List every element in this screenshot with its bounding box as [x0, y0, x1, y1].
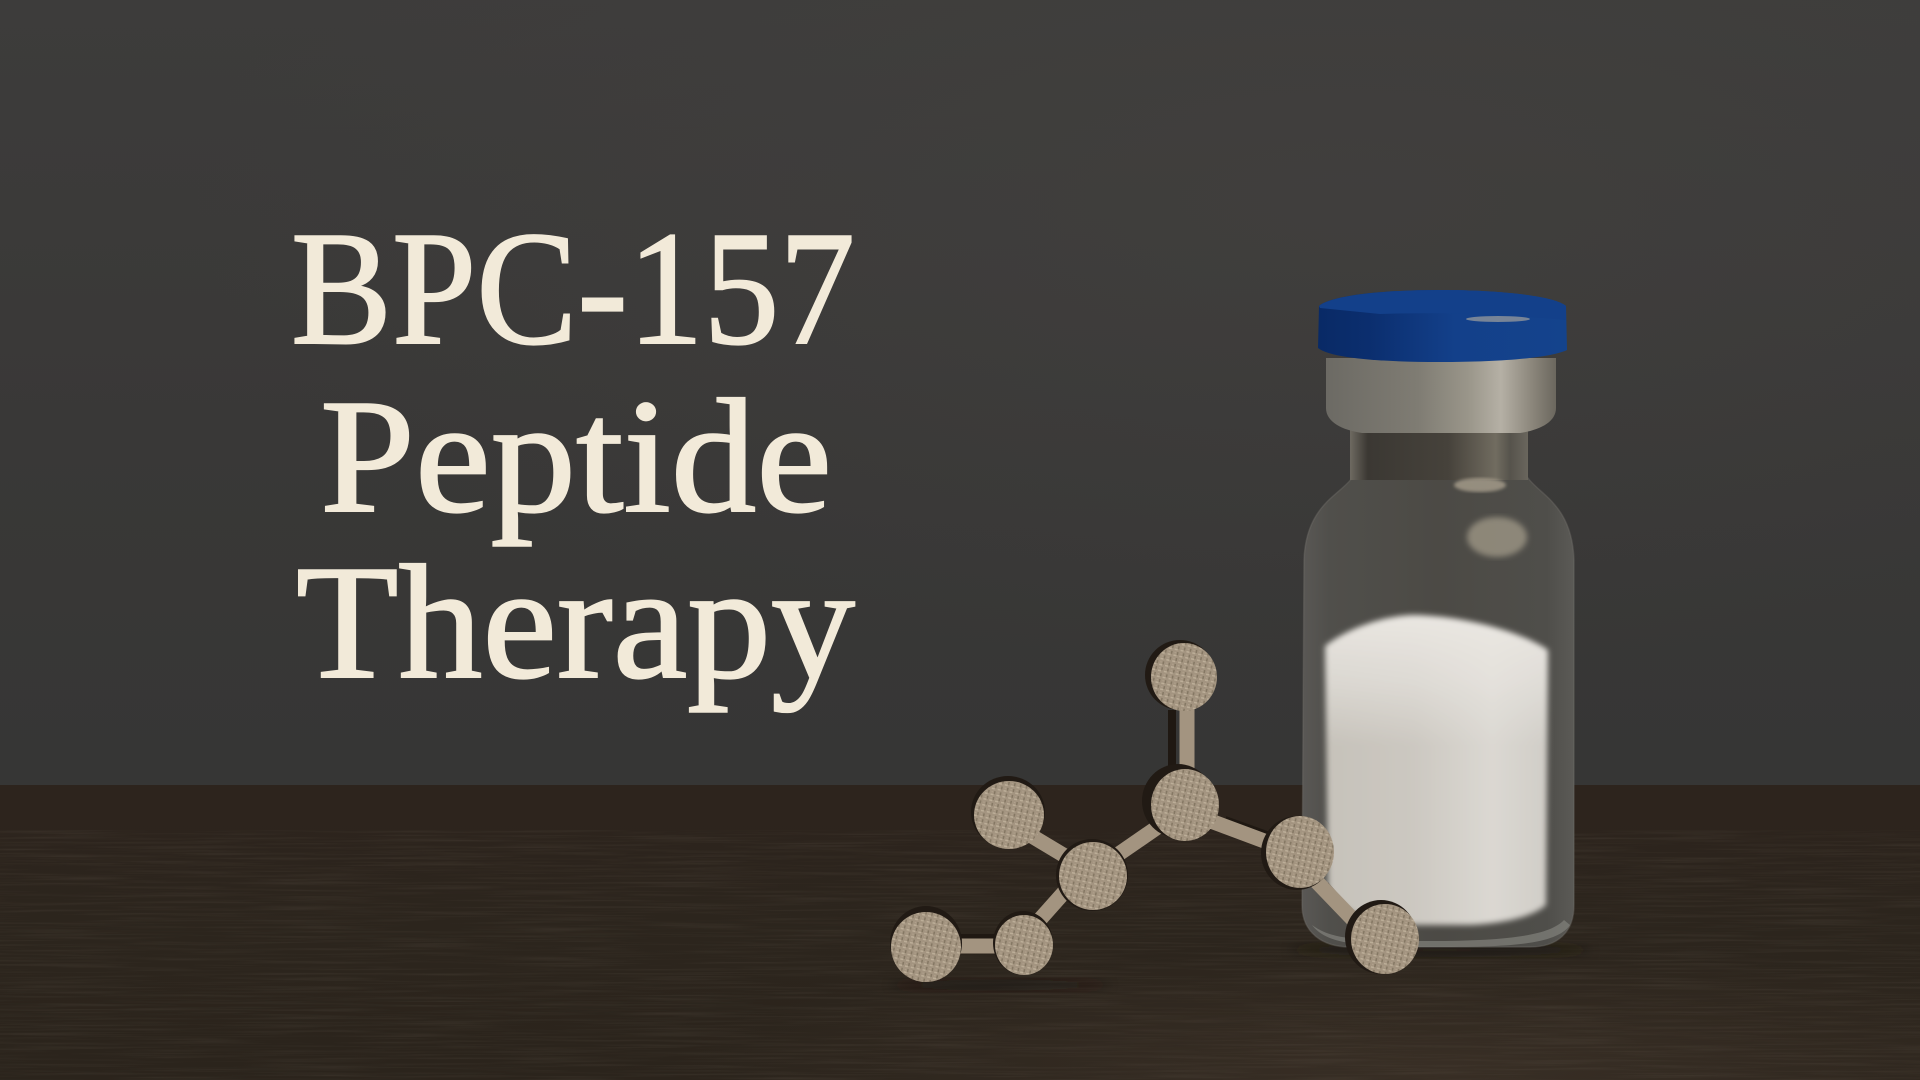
bonds	[950, 700, 1365, 946]
atom: bottom right	[1345, 900, 1419, 974]
title line: Therapy: Therapy	[296, 533, 855, 713]
atom: far left	[890, 906, 962, 982]
atom: right	[1261, 816, 1334, 890]
title	[291, 199, 855, 713]
wooden table	[0, 785, 1920, 1080]
title line: Peptide: Peptide	[320, 367, 832, 547]
wall background	[0, 0, 1920, 786]
neck highlight	[1454, 478, 1506, 492]
vial	[1302, 290, 1574, 947]
glass body	[1302, 478, 1574, 947]
bond shadows	[960, 710, 1365, 938]
atom: centre right	[1142, 764, 1219, 841]
title line: BPC-157: BPC-157	[291, 199, 855, 379]
blue cap	[1318, 290, 1567, 362]
atom: upper left	[971, 776, 1045, 849]
glass base	[1312, 920, 1570, 947]
vial shadow on table	[1290, 943, 1590, 957]
metal collar	[1326, 358, 1556, 433]
atom: lower	[993, 911, 1053, 975]
atom: middle	[1056, 839, 1128, 911]
molecule model	[890, 640, 1419, 991]
glass highlight	[1467, 517, 1527, 557]
vial neck	[1350, 428, 1528, 480]
atom: top	[1145, 640, 1217, 711]
molecule shadow	[890, 979, 1110, 991]
powder	[1325, 615, 1548, 925]
